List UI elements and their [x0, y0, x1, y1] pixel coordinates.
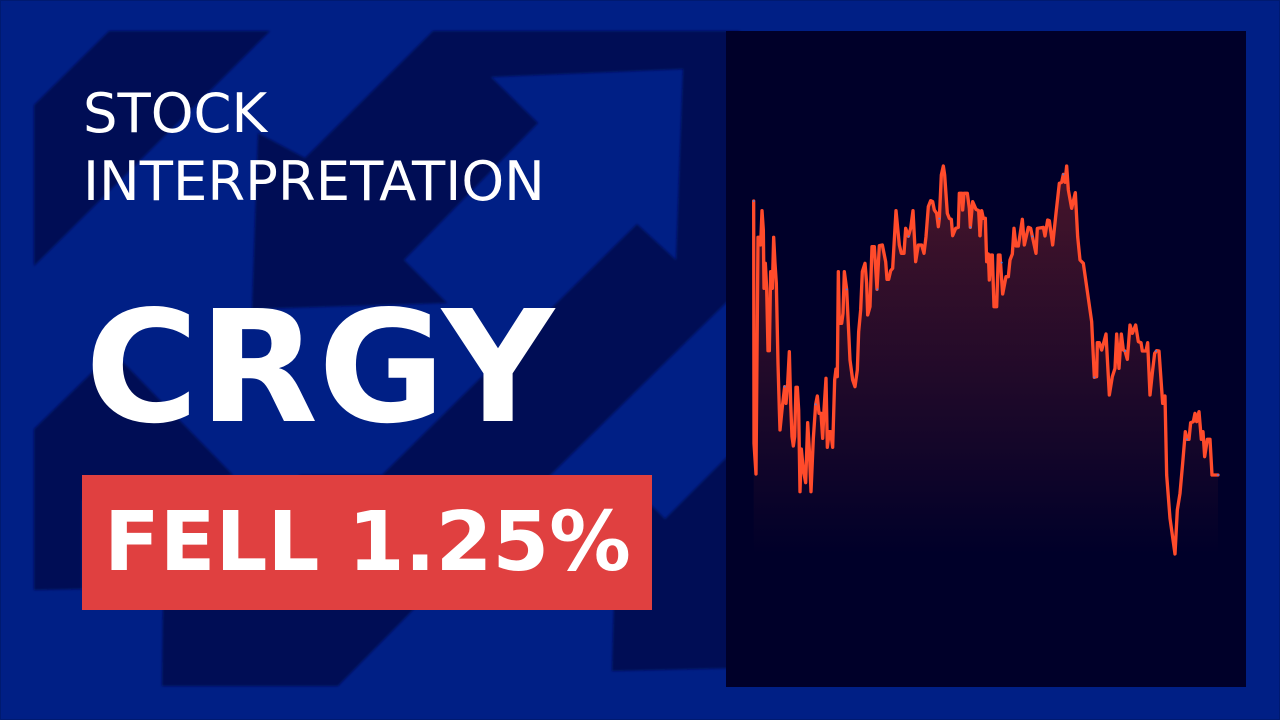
change badge [82, 475, 652, 610]
title: stock interpretation: STOCK [83, 82, 267, 145]
title: stock interpretation: INTERPRETATION [83, 150, 545, 213]
badge text: FELL 1.25% [104, 495, 631, 590]
chart panel [726, 31, 1246, 687]
title: stock interpretation [83, 82, 545, 213]
ticker: CRGY: CRGY [85, 277, 554, 458]
